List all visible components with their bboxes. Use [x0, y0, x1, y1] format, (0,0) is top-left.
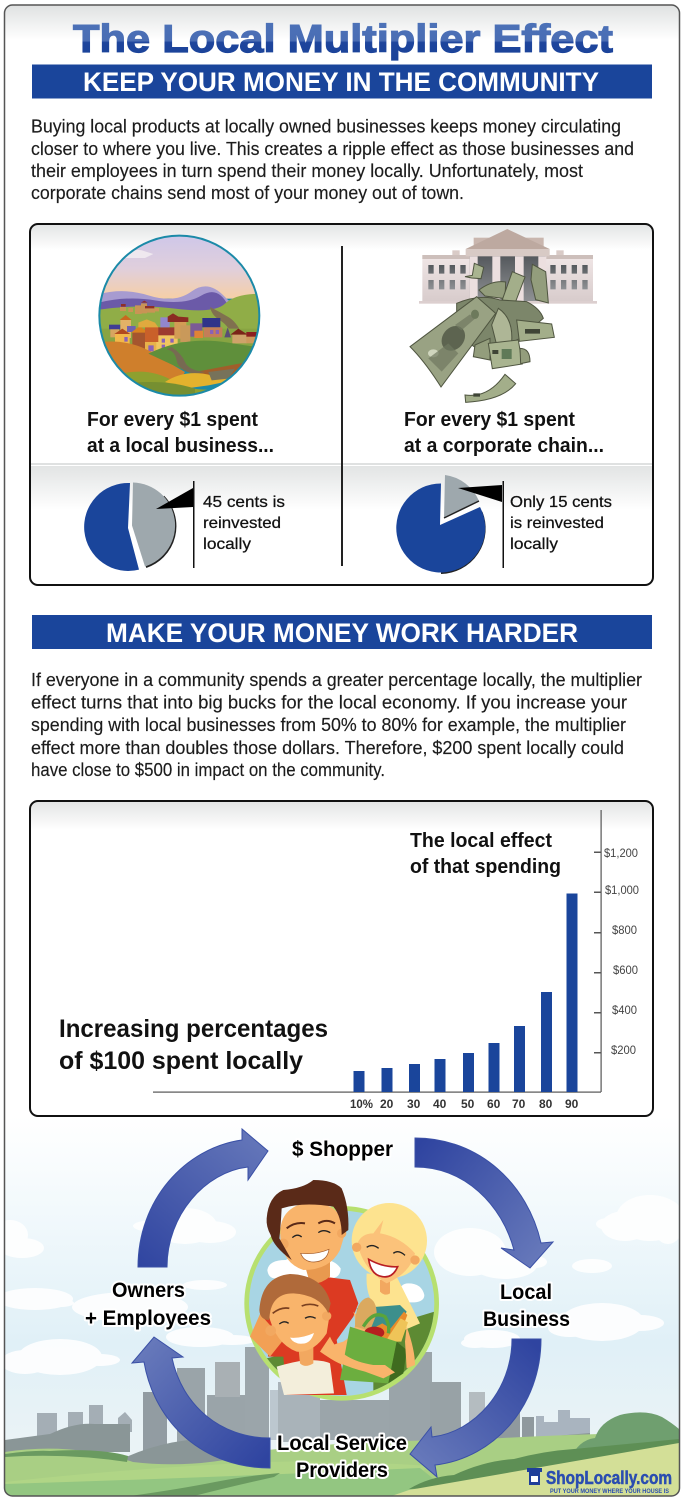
title: The Local Multiplier Effect: [73, 18, 613, 61]
intro text: their employees in turn spend their money locally. Unfortunately, most: [31, 161, 583, 181]
city skyline: [37, 1347, 590, 1453]
label: owners and employees: + Employees: [85, 1307, 211, 1330]
arrow: service providers to owners: [132, 1337, 270, 1468]
chart heading: increasing percentages: Increasing percentages: [59, 1015, 328, 1043]
boy: [259, 1274, 334, 1395]
label: local service providers: Local Service: [277, 1432, 407, 1455]
man: [250, 1180, 358, 1395]
x axis labels: 90: [565, 1097, 579, 1111]
label: local business: [483, 1281, 570, 1331]
icon: happy family: [240, 1180, 443, 1403]
y axis labels: [604, 848, 639, 1057]
left heading: For every $1 spent: [87, 409, 258, 431]
x axis labels: 30: [407, 1097, 421, 1111]
chart heading: local effect: [410, 830, 561, 878]
y axis labels: $1,200: [604, 848, 638, 860]
arrow: shopper to local business: [415, 1138, 553, 1268]
left heading: [87, 409, 274, 457]
intro text: [31, 116, 634, 203]
explanatory text: have close to $500 in impact on the community.: [31, 760, 385, 780]
right heading: [404, 409, 604, 457]
label: local service providers: [277, 1432, 407, 1482]
explanatory text: spending with local businesses from 50% to 80% for example, the multiplier: [31, 715, 626, 735]
pie label: 45 cents: reinvested: [203, 515, 281, 532]
logo: ShopLocally.com: PUT YOUR MONEY WHERE YOUR HOUSE IS: [550, 1489, 669, 1495]
pie label: 45 cents: 45 cents is: [203, 494, 285, 511]
panel: bar chart: [30, 801, 653, 1116]
x axis labels: 40: [433, 1097, 447, 1111]
chart heading: local effect: of that spending: [410, 856, 561, 878]
logo: ShopLocally.com: [527, 1468, 672, 1495]
pie chart: 45 cents: [84, 481, 194, 571]
panel: comparison: [30, 224, 653, 585]
chart axes: [153, 810, 602, 1093]
heading band: work harder: MAKE YOUR MONEY WORK HARDER: [106, 618, 578, 648]
explanatory text: If everyone in a community spends a greater percentage locally, the multiplier: [31, 670, 642, 690]
x axis labels: 20: [380, 1097, 394, 1111]
label: local business: Local: [500, 1281, 552, 1304]
left heading: at a local business...: [87, 435, 274, 457]
explanatory text: [31, 670, 642, 780]
explanatory text: effect more than doubles those dollars. Therefore, $200 spent locally could: [31, 738, 624, 758]
icon: village: [95, 232, 266, 399]
x axis labels: 60: [487, 1097, 501, 1111]
chart heading: increasing percentages: [59, 1015, 328, 1075]
chart heading: local effect: The local effect: [410, 830, 552, 852]
right heading: at a corporate chain...: [404, 435, 604, 457]
bars: [354, 894, 578, 1092]
explanatory text: effect turns that into big bucks for the local economy. If you increase your: [31, 692, 627, 712]
label: owners and employees: [85, 1279, 211, 1330]
woman: [320, 1203, 427, 1383]
arrow: owners to shopper: [138, 1129, 268, 1267]
pie label: 45 cents: [203, 494, 285, 553]
y axis labels: $1,000: [605, 885, 639, 897]
x axis labels: 70: [512, 1097, 526, 1111]
x axis labels: 80: [539, 1097, 553, 1111]
y axis labels: $600: [613, 965, 638, 977]
x axis labels: 10%: [350, 1097, 373, 1111]
y axis labels: $400: [612, 1005, 637, 1017]
label: local service providers: Providers: [296, 1459, 388, 1482]
y axis labels: $800: [612, 925, 637, 937]
label: local business: Business: [483, 1308, 570, 1331]
label: owners and employees: Owners: [112, 1279, 185, 1302]
arrow: local business to service providers: [410, 1339, 541, 1477]
label: shopper: $ Shopper: [292, 1138, 393, 1161]
pie label: 15 cents: is reinvested: [510, 515, 604, 532]
chart heading: increasing percentages: of $100 spent locally: [59, 1047, 303, 1075]
pie label: 15 cents: [510, 494, 612, 553]
pie chart: 15 cents: [396, 475, 504, 573]
x axis labels: [350, 1097, 579, 1111]
intro text: corporate chains send most of your money out of town.: [31, 183, 464, 203]
landscape background: [5, 1175, 679, 1496]
hills and ground: [5, 1424, 224, 1464]
pie label: 45 cents: locally: [203, 536, 251, 553]
heading band: work harder: [32, 615, 652, 649]
intro text: closer to where you live. This creates a ripple effect as those businesses and: [31, 139, 634, 159]
pie label: 15 cents: Only 15 cents: [510, 494, 612, 511]
pie label: 15 cents: locally: [510, 536, 558, 553]
intro text: Buying local products at locally owned businesses keeps money circulating: [31, 116, 621, 136]
icon: corporate building with money: [410, 229, 597, 402]
y axis labels: $200: [611, 1045, 636, 1057]
heading band: keep your money: KEEP YOUR MONEY IN THE COMMUNITY: [83, 67, 599, 97]
right heading: For every $1 spent: [404, 409, 575, 431]
x axis labels: 50: [461, 1097, 475, 1111]
